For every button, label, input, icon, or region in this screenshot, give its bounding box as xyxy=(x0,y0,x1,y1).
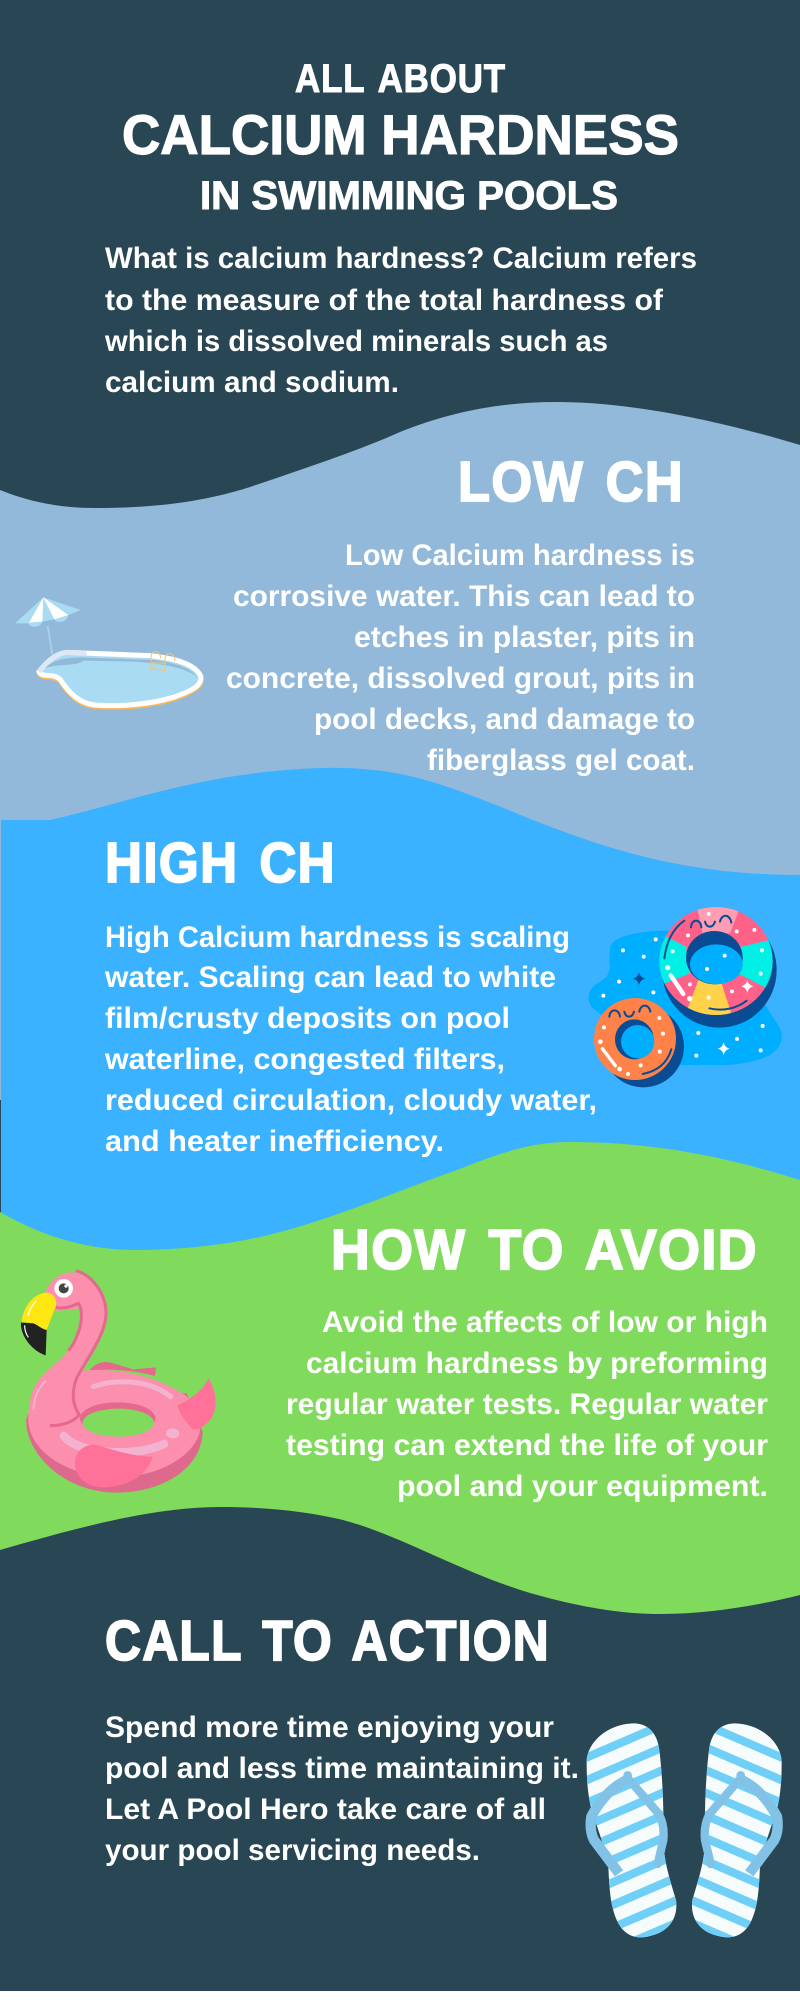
high CH text: film/crusty deposits on pool xyxy=(105,1002,510,1035)
panel: call to action xyxy=(0,1507,800,1991)
high CH text: and heater inefficiency. xyxy=(105,1125,444,1158)
call to action text: Let A Pool Hero take care of all xyxy=(105,1793,546,1826)
how to avoid text: testing can extend the life of your xyxy=(286,1429,769,1462)
call to action text xyxy=(105,1711,579,1867)
low CH text: etches in plaster, pits in xyxy=(354,621,695,654)
icon: swim rings xyxy=(589,903,782,1087)
call to action text: your pool servicing needs. xyxy=(105,1834,480,1867)
intro text block: What is calcium hardness? Calcium refers xyxy=(105,242,697,275)
panel: low CH xyxy=(0,402,800,1100)
title: IN SWIMMING POOLS xyxy=(200,174,618,218)
how to avoid wave background xyxy=(0,1142,800,1620)
low CH text: Low Calcium hardness is xyxy=(345,539,695,572)
low CH text: fiberglass gel coat. xyxy=(427,744,695,777)
high CH heading: HIGH CH xyxy=(105,831,336,895)
high CH text xyxy=(104,921,597,1158)
how to avoid text: pool and your equipment. xyxy=(397,1470,768,1503)
title xyxy=(122,57,679,218)
high CH text: water. Scaling can lead to white xyxy=(104,961,556,994)
intro text block: calcium and sodium. xyxy=(105,366,399,399)
how to avoid text: Avoid the affects of low or high xyxy=(322,1306,768,1339)
how to avoid heading: HOW TO AVOID xyxy=(331,1218,758,1282)
low CH wave background xyxy=(0,402,800,1100)
how to avoid text: regular water tests. Regular water xyxy=(286,1388,769,1421)
call to action wave background xyxy=(0,1507,800,1991)
high CH text: High Calcium hardness is scaling xyxy=(105,921,570,954)
low CH heading: LOW CH xyxy=(458,450,684,514)
how to avoid text: calcium hardness by preforming xyxy=(306,1347,768,1380)
high CH text: waterline, congested filters, xyxy=(104,1043,505,1076)
low CH text xyxy=(226,539,695,777)
title: CALCIUM HARDNESS xyxy=(122,103,679,166)
icon: flip flops xyxy=(570,1707,798,1969)
title: ALL ABOUT xyxy=(295,57,506,101)
intro text block: to the measure of the total hardness of xyxy=(105,284,663,317)
high CH wave background xyxy=(1,768,800,1255)
call to action text: Spend more time enjoying your xyxy=(105,1711,555,1744)
high CH text: reduced circulation, cloudy water, xyxy=(105,1084,597,1117)
low CH text: corrosive water. This can lead to xyxy=(233,580,695,613)
intro text block xyxy=(104,242,697,399)
intro text block: which is dissolved minerals such as xyxy=(104,325,608,358)
call to action heading: CALL TO ACTION xyxy=(105,1609,550,1673)
panel: high CH xyxy=(1,768,800,1255)
call to action text: pool and less time maintaining it. xyxy=(105,1752,579,1785)
low CH text: concrete, dissolved grout, pits in xyxy=(226,662,695,695)
panel: how to avoid xyxy=(0,1142,800,1620)
icon: flamingo float xyxy=(21,1271,215,1493)
low CH text: pool decks, and damage to xyxy=(314,703,695,736)
how to avoid text xyxy=(286,1306,769,1503)
icon: swimming pool with umbrella xyxy=(15,597,201,707)
